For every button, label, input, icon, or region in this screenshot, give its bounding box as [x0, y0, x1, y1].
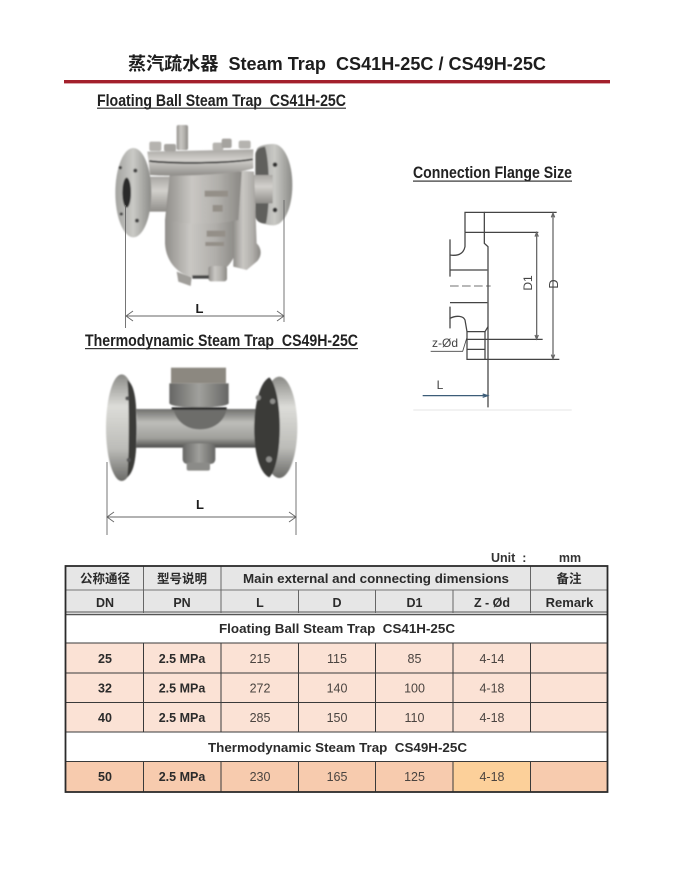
lower body [165, 220, 237, 278]
flange diagram labels: D [546, 279, 561, 289]
label L: floating ball trap: L [196, 301, 204, 316]
unit note [491, 551, 581, 565]
unit note: Unit : [491, 551, 526, 565]
row: DN 40: 2.5 MPa [159, 711, 206, 725]
header row 2: L [256, 596, 264, 610]
header row 1: 公称通径 [80, 571, 130, 586]
row: DN 50: 2.5 MPa [159, 770, 206, 784]
label L: thermodynamic trap: L [196, 497, 204, 512]
row: DN 32: 4-18 [479, 682, 505, 696]
row: DN 32: 2.5 MPa [159, 682, 206, 696]
title rule [64, 80, 610, 83]
D dimension [551, 213, 555, 359]
product image: thermodynamic steam trap [106, 368, 297, 481]
header row 2: D [332, 596, 342, 610]
header row 1: Main external and connecting dimensions [243, 571, 509, 586]
z-Ød leader [431, 338, 467, 351]
row: DN 32 [98, 682, 505, 696]
row: DN 50: 125 [404, 770, 425, 784]
cover [147, 149, 253, 176]
header row 1 [80, 571, 582, 586]
row: DN 50: 4-18 [479, 770, 505, 784]
section title: CS41H-25C: Floating Ball Steam Trap CS41H-25C [219, 621, 456, 636]
specification table [66, 566, 608, 792]
D1 dimension [535, 233, 539, 338]
bottom plug and feet [208, 266, 227, 281]
right flange [261, 377, 297, 478]
L arrow [423, 394, 487, 398]
pipe [128, 409, 272, 448]
heading: floating ball steam trap: Floating Ball Steam Trap CS41H-25C [97, 91, 346, 110]
unit note: mm [559, 551, 581, 565]
row: DN 40: 40 [98, 711, 112, 725]
row fills [66, 643, 607, 792]
header row 2: PN [173, 596, 191, 610]
header row 2: Z - Ød [474, 596, 510, 610]
row: DN 32: 140 [327, 682, 347, 696]
row: DN 32: 272 [250, 682, 270, 696]
table grid [66, 566, 608, 792]
left flange [106, 374, 137, 481]
row: DN 50 [98, 770, 505, 784]
dimension L: floating ball trap [126, 200, 284, 328]
flange diagram labels: D1 [521, 275, 535, 291]
flange diagram labels: L [437, 378, 444, 392]
header row 2 [96, 595, 594, 610]
baseline [413, 409, 572, 411]
product image: floating ball steam trap [115, 125, 292, 286]
row: DN 40: 150 [327, 711, 347, 725]
flange diagram labels: z-Ød [432, 336, 458, 350]
row: DN 40: 110 [405, 711, 425, 725]
top valve [177, 125, 188, 150]
row: DN 40: 285 [250, 711, 270, 725]
side chamber [233, 170, 261, 270]
bowl [173, 408, 227, 429]
row: DN 25: 85 [408, 652, 421, 666]
right flange [257, 144, 292, 225]
header row 2: Remark [546, 595, 594, 610]
row: DN 40: 4-18 [479, 711, 505, 725]
row: DN 50: 230 [250, 770, 270, 784]
row: DN 25: 2.5 MPa [159, 652, 206, 666]
upper body [165, 172, 242, 224]
bolts [149, 142, 161, 151]
row: DN 25: 25 [98, 652, 112, 666]
header row 2: D1 [407, 596, 423, 610]
heading: thermodynamic steam trap: Thermodynamic Steam Trap CS49H-25C [85, 331, 358, 350]
header row 1: 备注 [556, 571, 582, 586]
cast marks [205, 191, 228, 246]
heading: connection flange size: Connection Flange Size [413, 163, 572, 182]
row: DN 25: 215 [250, 652, 270, 666]
flange outline [450, 212, 488, 359]
row: DN 50: 165 [327, 770, 347, 784]
bottom plug [183, 443, 215, 464]
row: DN 40 [98, 711, 505, 725]
table header fills [66, 566, 607, 613]
left pipe [143, 177, 180, 212]
row: DN 25: 115 [327, 652, 347, 666]
row: DN 25: 4-14 [479, 652, 505, 666]
row: DN 32: 100 [404, 682, 425, 696]
flange diagram labels [432, 275, 561, 392]
header row 2: DN [96, 596, 114, 610]
left flange [115, 148, 151, 237]
flange section diagram [413, 212, 572, 410]
section title: CS49H-25C: Thermodynamic Steam Trap CS49H-25C [208, 740, 468, 755]
title: 蒸汽疏水器 Steam Trap CS41H-25C / CS49H-25C [128, 53, 546, 74]
row: DN 32: 32 [98, 682, 112, 696]
header row 1: 型号说明 [157, 571, 207, 586]
row: DN 50: 50 [98, 770, 112, 784]
row: DN 25 [98, 652, 505, 666]
dimension L: thermodynamic trap [107, 462, 296, 535]
cap [169, 383, 229, 407]
